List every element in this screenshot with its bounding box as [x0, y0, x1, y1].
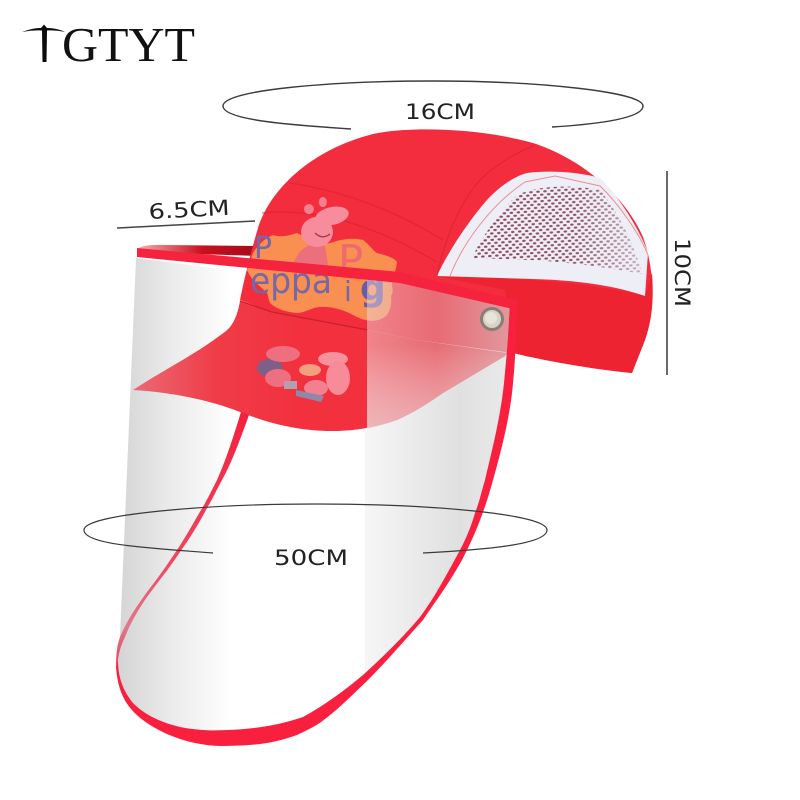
mesh side panel — [437, 172, 648, 296]
mesh piping — [450, 176, 648, 276]
dimension: shield width 50CM — [84, 504, 547, 570]
metal snap button — [480, 307, 504, 331]
dimension: height 10CM: 10CM — [670, 238, 694, 307]
crown stitching — [262, 145, 535, 276]
pig dress — [291, 244, 329, 271]
peppa lettering: P — [254, 231, 272, 266]
pig ears — [304, 197, 327, 214]
face shield clear panel — [110, 250, 515, 750]
dimension: shield width 50CM: 50CM — [274, 546, 348, 570]
Peppa Pig logo badge: eppa — [250, 261, 332, 302]
rear rim of shield — [137, 245, 258, 256]
shield red edge binding: right and bottom — [116, 306, 517, 746]
Peppa Pig logo badge: P — [338, 236, 363, 285]
cap brim — [133, 301, 507, 431]
dimension: brim 6.5CM — [117, 196, 255, 228]
back band of cap — [437, 273, 653, 373]
pig snout — [314, 204, 350, 228]
mesh holes — [472, 187, 642, 274]
pig smile — [315, 233, 330, 237]
shield top band — [137, 248, 517, 310]
logo: TGTYT: GTYT — [62, 17, 195, 72]
Peppa Pig logo badge: g — [360, 268, 386, 309]
dimension: brim 6.5CM: 6.5CM — [148, 196, 230, 224]
Peppa Pig logo badge — [247, 197, 397, 321]
shield red edge binding: left string — [116, 412, 249, 667]
infographic canvas — [22, 24, 691, 746]
Peppa Pig logo badge: i — [344, 275, 352, 308]
Peppa family print on brim — [257, 346, 350, 402]
pig head — [301, 217, 333, 247]
orange cloud — [247, 233, 397, 321]
cap crown — [240, 129, 652, 373]
brim seam shadow — [240, 301, 368, 330]
shield overlay across cap — [367, 277, 510, 429]
red cap — [133, 129, 653, 431]
dimension: crown width 16CM — [223, 81, 643, 129]
dimension: crown width 16CM: 16CM — [405, 100, 475, 124]
